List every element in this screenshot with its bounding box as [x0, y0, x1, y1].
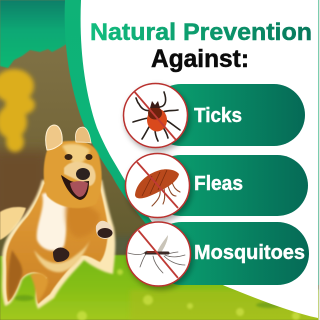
icon: flea — [126, 154, 190, 218]
icon: tick — [124, 84, 188, 148]
muzzle — [64, 162, 96, 186]
label: Mosquitoes — [194, 242, 305, 264]
row: ticks — [124, 84, 305, 148]
heading line 1: Natural Prevention — [90, 19, 312, 46]
face highlights — [62, 144, 90, 166]
pill — [150, 222, 309, 285]
head — [44, 141, 102, 208]
pill — [150, 155, 308, 216]
label: Fleas — [194, 173, 243, 195]
title — [90, 19, 312, 73]
shaded leg and belly — [8, 250, 22, 300]
mouth — [61, 175, 89, 200]
paws — [96, 221, 113, 239]
row: fleas — [126, 154, 308, 218]
heading line 2: Against: — [151, 45, 249, 73]
dog — [0, 125, 115, 309]
green top wash — [0, 0, 70, 68]
white chest — [37, 193, 74, 251]
row: mosquitoes — [126, 222, 309, 286]
orange shoulder — [66, 203, 100, 238]
pale belly fur — [34, 240, 90, 272]
dog body rim light — [2, 180, 115, 309]
eyes — [64, 154, 72, 160]
icon: mosquito — [126, 222, 190, 286]
yellow foliage — [0, 69, 35, 152]
grass — [0, 255, 320, 320]
white panel with green curved band — [65, 0, 320, 320]
label: Ticks — [194, 105, 242, 127]
dog tail — [0, 207, 26, 240]
pill — [150, 84, 305, 146]
ears — [46, 125, 62, 150]
tongue — [70, 181, 88, 197]
dog body — [6, 184, 108, 304]
nose — [76, 168, 90, 180]
